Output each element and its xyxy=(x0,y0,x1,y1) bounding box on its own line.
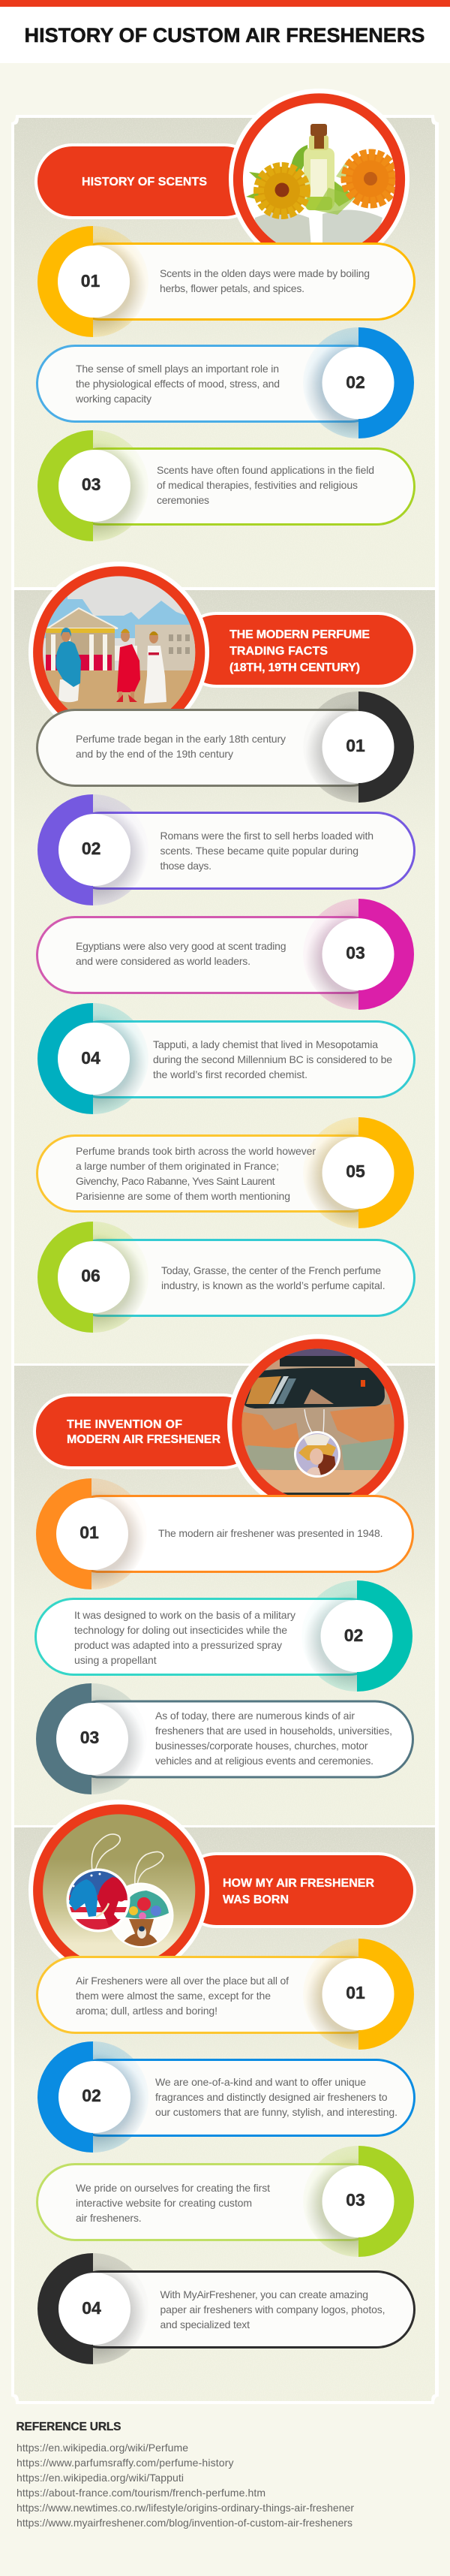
panel: section 1 background xyxy=(14,118,435,587)
text xyxy=(76,1975,289,2017)
image: two printed air fresheners xyxy=(28,1800,209,1959)
ring and pill xyxy=(36,1478,412,1589)
number: 01 xyxy=(80,1523,99,1542)
text: fresheners that are used in households, universities, xyxy=(155,1725,392,1737)
item 4.4 xyxy=(38,2253,414,2364)
text: and specialized text xyxy=(160,2318,250,2330)
heading: THE MODERN PERFUME xyxy=(230,628,370,641)
text: fragrances and distinctly designed air fresheners to xyxy=(155,2091,388,2103)
heading xyxy=(230,628,370,674)
image: perfume bottle and flowers xyxy=(229,89,410,243)
heading: THE INVENTION OF xyxy=(67,1418,182,1431)
ring and pill xyxy=(38,1222,414,1333)
panel: section 3 background xyxy=(14,1366,435,1825)
section 2 header xyxy=(28,562,416,715)
title: HISTORY OF CUSTOM AIR FRESHENERS xyxy=(24,24,424,47)
text xyxy=(76,940,286,967)
text: scents. These became quite popular during xyxy=(160,845,358,857)
item 2.1 xyxy=(38,691,414,803)
ring and pill xyxy=(38,2253,414,2364)
text: The sense of smell plays an important role in xyxy=(76,363,279,375)
number: 02 xyxy=(82,839,100,858)
heading xyxy=(67,1418,220,1446)
item 1.1 xyxy=(38,226,414,337)
text: Romans were the first to sell herbs loaded with xyxy=(160,830,374,842)
item 1.2 xyxy=(38,327,414,438)
heading: HOW MY AIR FRESHENER xyxy=(223,1877,374,1890)
text: Parisienne are some of them worth mentioning xyxy=(76,1190,290,1202)
number: 02 xyxy=(82,2086,101,2105)
text: aroma; dull, artless and boring! xyxy=(76,2005,218,2017)
number: 01 xyxy=(346,1983,365,2002)
reference list: https://en.wikipedia.org/wiki/Tapputi xyxy=(16,2472,184,2484)
header banner xyxy=(34,1395,260,1468)
ring and pill xyxy=(38,1117,414,1228)
item 4.3 xyxy=(38,2146,414,2257)
number: 03 xyxy=(82,475,100,494)
number: 06 xyxy=(81,1266,100,1285)
heading: TRADING FACTS xyxy=(230,645,328,658)
text xyxy=(160,267,370,294)
number: 03 xyxy=(346,943,365,963)
reference list: https://www.parfumsraffy.com/perfume-history xyxy=(16,2457,234,2469)
section 1 header xyxy=(34,89,410,243)
text xyxy=(76,733,286,760)
item 3.2 xyxy=(36,1580,412,1692)
ring and pill xyxy=(38,1003,414,1114)
text: the world’s first recorded chemist. xyxy=(153,1068,308,1080)
number: 04 xyxy=(82,2298,101,2318)
reference list: https://en.wikipedia.org/wiki/Perfume xyxy=(16,2442,188,2454)
number: 02 xyxy=(344,1625,363,1645)
item 2.5 xyxy=(38,1117,414,1228)
text: interactive website for creating custom xyxy=(76,2197,252,2209)
item 2.3 xyxy=(38,899,414,1010)
text: herbs, flower petals, and spices. xyxy=(160,282,304,294)
text: The modern air freshener was presented in 1948. xyxy=(158,1527,382,1539)
ring and pill xyxy=(38,691,414,803)
item 3.1 xyxy=(36,1478,412,1589)
header banner xyxy=(36,145,261,218)
reference list: https://about-france.com/tourism/french-perfume.htm xyxy=(16,2487,266,2499)
text: those days. xyxy=(160,860,212,872)
image: Roman figures in front of temple xyxy=(28,562,209,715)
header banner xyxy=(180,613,415,686)
text xyxy=(76,2182,270,2224)
text: product was adapted into a pressurized spray xyxy=(74,1639,282,1651)
text: Scents have often found applications in the field xyxy=(157,464,374,476)
panel: section 4 background xyxy=(14,1827,435,2401)
text xyxy=(74,1609,296,1666)
text xyxy=(157,464,374,506)
text xyxy=(155,2076,398,2118)
text: our customers that are funny, stylish, and interesting. xyxy=(155,2106,398,2118)
text: technology for doling out insecticides while the xyxy=(74,1624,287,1636)
item 1.3 xyxy=(38,430,414,541)
text: them were almost the same, except for the xyxy=(76,1990,271,2002)
text: Givenchy, Paco Rabanne, Yves Saint Laurent xyxy=(76,1175,275,1187)
text: industry, is known as the world’s perfume capital. xyxy=(161,1279,386,1291)
text: We pride on ourselves for creating the first xyxy=(76,2182,270,2194)
text: paper air fresheners with company logos, photos, xyxy=(160,2303,386,2315)
number: 04 xyxy=(81,1048,100,1068)
text: working capacity xyxy=(75,393,152,405)
text: and by the end of the 19th century xyxy=(76,748,233,760)
text: the physiological effects of mood, stress, and xyxy=(76,378,280,390)
heading: MODERN AIR FRESHENER xyxy=(67,1433,220,1446)
text: vehicles and at religious events and ceremonies. xyxy=(155,1755,374,1767)
text xyxy=(76,1145,316,1202)
heading: HISTORY OF SCENTS xyxy=(82,176,207,188)
number: 05 xyxy=(346,1161,365,1181)
ring and pill xyxy=(38,430,414,541)
item 4.2 xyxy=(38,2041,414,2153)
text: It was designed to work on the basis of a military xyxy=(74,1609,296,1621)
number: 02 xyxy=(346,372,365,392)
number: 01 xyxy=(346,736,365,755)
text: Egyptians were also very good at scent trading xyxy=(76,940,286,952)
text xyxy=(160,2288,386,2330)
header banner xyxy=(180,1854,415,1927)
text xyxy=(160,830,374,872)
ring and pill xyxy=(38,899,414,1010)
text: of medical therapies, festivities and religious xyxy=(157,479,358,491)
text xyxy=(161,1264,386,1291)
reference heading: REFERENCE URLS xyxy=(16,2421,122,2433)
heading xyxy=(223,1877,374,1906)
item 4.1 xyxy=(38,1939,414,2050)
image: air freshener hanging from car mirror xyxy=(227,1334,408,1495)
text: As of today, there are numerous kinds of air xyxy=(155,1710,355,1722)
ring and pill xyxy=(38,2146,414,2257)
text xyxy=(153,1038,392,1080)
text: and were considered as world leaders. xyxy=(76,955,250,967)
text: during the second Millennium BC is considered to be xyxy=(153,1053,392,1065)
number: 01 xyxy=(81,271,100,291)
text: With MyAirFreshener, you can create amazing xyxy=(160,2288,368,2300)
text: Air Fresheners were all over the place but all of xyxy=(76,1975,289,1987)
text: businesses/corporate houses, churches, motor xyxy=(155,1740,368,1752)
ring and pill xyxy=(36,1580,412,1692)
reference list: https://www.newtimes.co.rw/lifestyle/origins-ordinary-things-air-freshener xyxy=(16,2502,354,2514)
number: 03 xyxy=(346,2190,365,2210)
item 3.3 xyxy=(36,1683,412,1794)
text: Tapputi, a lady chemist that lived in Mesopotamia xyxy=(153,1038,378,1050)
ring and pill xyxy=(36,1683,412,1794)
text: air fresheners. xyxy=(76,2212,142,2224)
ring and pill xyxy=(38,794,414,905)
text: We are one-of-a-kind and want to offer unique xyxy=(155,2076,366,2088)
ring and pill xyxy=(38,2041,414,2153)
text xyxy=(75,363,280,405)
top red bar xyxy=(0,0,450,7)
text: Today, Grasse, the center of the French perfume xyxy=(161,1264,381,1276)
number: 03 xyxy=(80,1728,99,1747)
reference list xyxy=(16,2442,354,2529)
title band xyxy=(0,7,450,63)
heading: WAS BORN xyxy=(223,1894,289,1906)
item 2.6 xyxy=(38,1222,414,1333)
ring and pill xyxy=(38,226,414,337)
text: ceremonies xyxy=(157,494,209,506)
text: Perfume brands took birth across the world however xyxy=(76,1145,316,1157)
section 4 header xyxy=(28,1800,416,1959)
item 2.4 xyxy=(38,1003,414,1114)
ring and pill xyxy=(38,327,414,438)
text: Scents in the olden days were made by boiling xyxy=(160,267,370,279)
text: a large number of them originated in France; xyxy=(76,1160,279,1172)
text xyxy=(155,1710,392,1767)
ring and pill xyxy=(38,1939,414,2050)
reference list: https://www.myairfreshener.com/blog/invention-of-custom-air-fresheners xyxy=(16,2517,352,2529)
panel: section 2 background xyxy=(14,590,435,1363)
text: using a propellant xyxy=(74,1654,157,1666)
heading: (18TH, 19TH CENTURY) xyxy=(230,661,360,674)
text: Perfume trade began in the early 18th century xyxy=(76,733,286,745)
section 3 header xyxy=(33,1334,408,1495)
item 2.2 xyxy=(38,794,414,905)
